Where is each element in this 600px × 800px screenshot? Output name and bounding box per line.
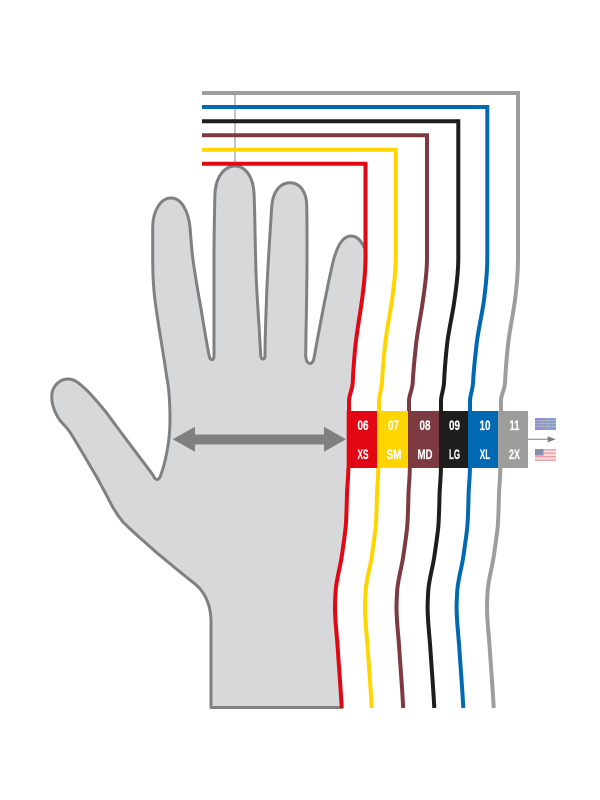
size 08 MD: MD: [418, 446, 432, 462]
size 06 XS: [347, 411, 377, 468]
size 11 2X: 2X: [509, 446, 520, 462]
size 11 2X: 11: [510, 417, 520, 433]
size 10 XL: XL: [480, 446, 491, 462]
size 11 2X: [498, 411, 528, 468]
measuring guide line at middle fingertip: [234, 93, 236, 167]
size 10 XL: [468, 411, 498, 468]
size line: blue XL: [202, 107, 487, 708]
size 07 SM: [377, 411, 408, 468]
size line: brown MD: [202, 135, 427, 708]
icon: EU flag: [535, 418, 556, 430]
size 08 MD: 08: [420, 417, 431, 433]
arrow: size system pointer: [528, 436, 556, 442]
size 06 XS: 06: [358, 417, 369, 433]
size 07 SM: SM: [386, 446, 402, 462]
size line: black LG: [202, 121, 458, 708]
size 06 XS: XS: [358, 446, 368, 462]
size line: yellow SM: [202, 150, 396, 708]
size band: [347, 411, 528, 468]
size 10 XL: 10: [480, 417, 491, 433]
icon: hand outline: [52, 166, 365, 708]
size line: gray 2X: [202, 93, 518, 708]
double arrow: palm width: [173, 427, 346, 452]
size 09 LG: [439, 411, 468, 468]
size 09 LG: LG: [449, 446, 460, 462]
size 08 MD: [408, 411, 439, 468]
size 07 SM: 07: [388, 417, 399, 433]
size 09 LG: 09: [449, 417, 460, 433]
size line: red XS: [202, 164, 366, 708]
icon: US flag: [535, 449, 556, 461]
